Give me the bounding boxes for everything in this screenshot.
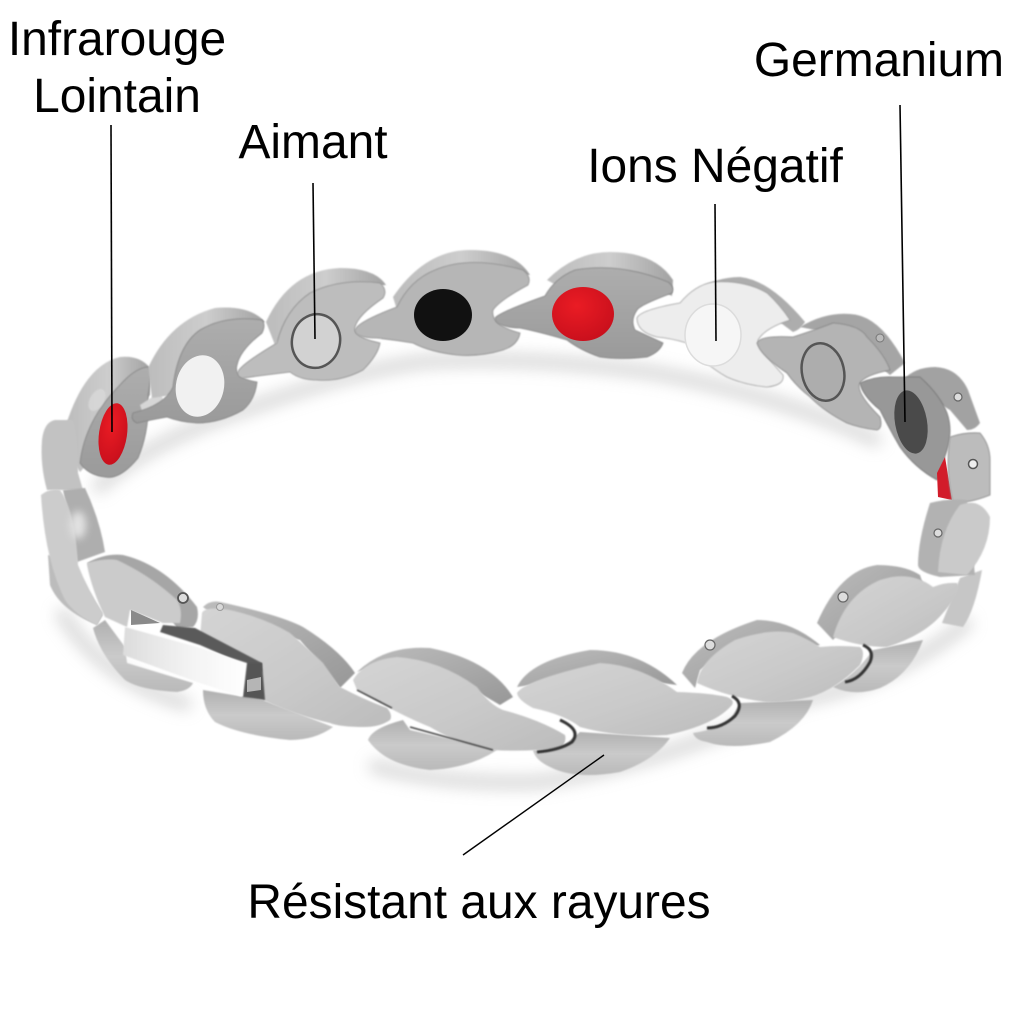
- seam line: [410, 727, 493, 750]
- stone: white: [685, 304, 741, 366]
- rivet: [876, 334, 884, 342]
- clasp shiny plate: [123, 625, 265, 700]
- label: germanium: Germanium: [754, 34, 1004, 87]
- stone: red: [552, 287, 614, 341]
- cast shadow: [60, 360, 970, 782]
- link: far infrared red stone: [66, 357, 150, 477]
- label: aimant: Aimant: [238, 116, 388, 169]
- link: white stone left: [132, 308, 265, 423]
- link: magnet right: [757, 314, 905, 430]
- rivet: [968, 460, 978, 468]
- label: infrarouge lointain: Lointain: [33, 70, 201, 123]
- link: front 1: [682, 620, 871, 746]
- pointer: scratch resistant: [463, 755, 604, 855]
- stone: dark germanium: [890, 388, 932, 456]
- link: left side top: [41, 420, 105, 625]
- hinge shadow: [845, 645, 871, 682]
- stone: red: [95, 401, 131, 467]
- rivet: [705, 640, 715, 650]
- stone: grey magnet: [796, 339, 850, 405]
- stone: grey magnet: [287, 310, 345, 372]
- label: ions negatif: Ions Négatif: [587, 140, 843, 193]
- link: white link: [637, 277, 805, 387]
- link: clasp right half: [200, 602, 392, 740]
- pointer: infrarouge: [111, 125, 112, 432]
- link: magnet: [238, 268, 386, 380]
- hinge shadow: [537, 720, 575, 752]
- bracelet: [41, 250, 990, 782]
- rivet: [954, 393, 962, 401]
- rivet: [216, 604, 224, 610]
- clasp opening: [131, 610, 160, 625]
- rivet: [178, 593, 188, 603]
- link: red stone: [495, 252, 673, 358]
- seam line: [357, 690, 392, 708]
- hinge shadow: [707, 696, 739, 728]
- link: front 3: [353, 648, 575, 770]
- link: black stone: [355, 250, 530, 355]
- link: germanium: [860, 367, 980, 480]
- link: right end with red stone: [937, 433, 990, 503]
- link: right side 1: [918, 499, 990, 627]
- rivet: [838, 592, 848, 602]
- stone: black: [414, 289, 472, 341]
- label: infrarouge lointain: Infrarouge: [8, 13, 226, 66]
- pointer: ions: [715, 204, 716, 341]
- link: right side 2: [817, 565, 958, 692]
- clasp left half: [87, 555, 198, 692]
- stone: white: [170, 351, 230, 421]
- label: resistant aux rayures: Résistant aux rayures: [247, 876, 711, 929]
- link: front 2: [517, 650, 739, 775]
- pointer: aimant: [313, 183, 315, 339]
- stone: red sliver: [937, 457, 952, 500]
- rivet: [934, 529, 942, 537]
- pointer: germanium: [900, 105, 905, 422]
